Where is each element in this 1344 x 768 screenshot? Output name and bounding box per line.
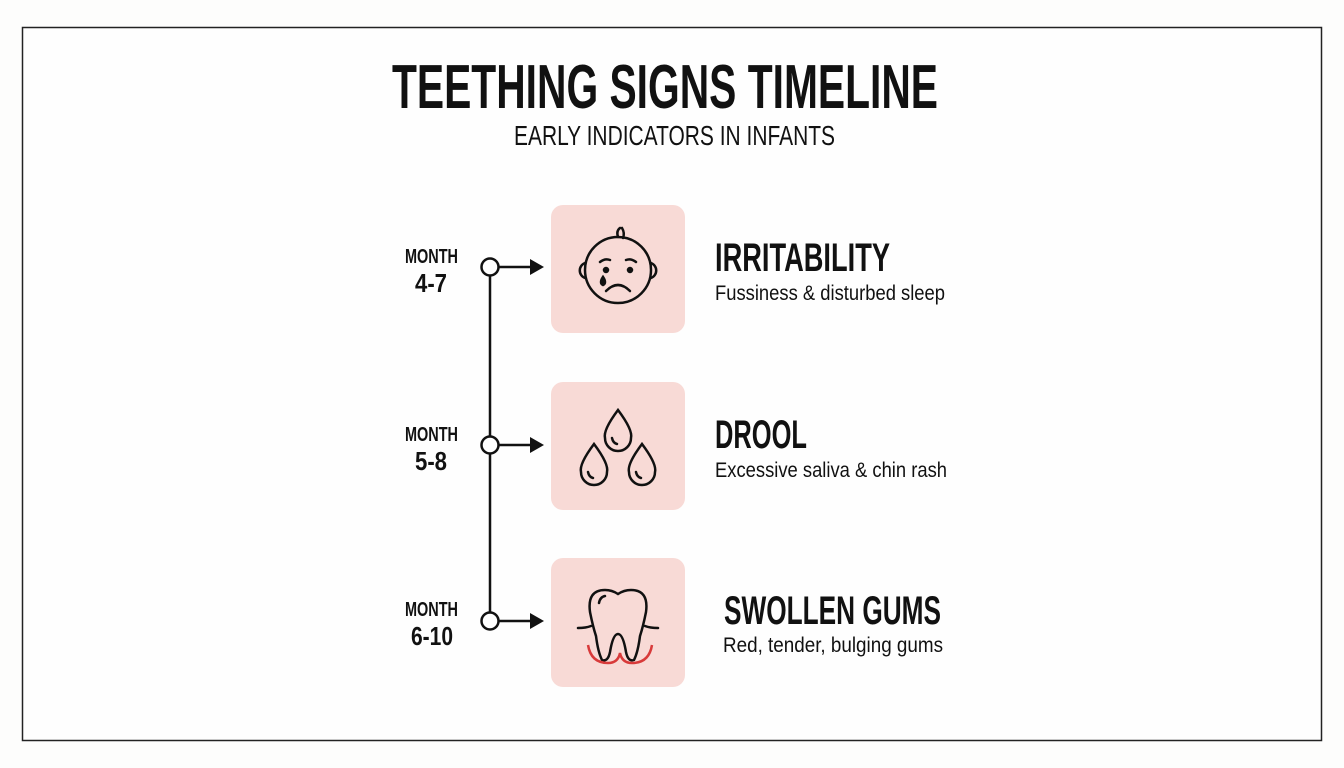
title: TEETHING SIGNS TIMELINE xyxy=(392,53,938,122)
month labels: 5-8 xyxy=(415,446,447,476)
month labels: 4-7 xyxy=(415,268,447,298)
icon: crying baby xyxy=(580,228,656,303)
icon: tooth xyxy=(578,590,658,660)
text: swollen gums: Red, tender, bulging gums xyxy=(723,634,943,657)
subtitle: EARLY INDICATORS IN INFANTS xyxy=(514,120,835,151)
month labels: MONTH xyxy=(405,246,458,268)
timeline xyxy=(482,258,532,630)
text: irritability: Fussiness & disturbed sleep xyxy=(715,282,945,305)
month labels xyxy=(405,246,458,651)
text: drool: Excessive saliva & chin rash xyxy=(715,459,947,482)
icon: drops xyxy=(581,410,655,485)
month labels: 6-10 xyxy=(411,621,453,651)
panel: swollen gums xyxy=(551,558,685,687)
panel: irritability xyxy=(551,205,685,333)
month labels: MONTH xyxy=(405,424,458,446)
month labels: MONTH xyxy=(405,599,458,621)
heading: swollen gums: SWOLLEN GUMS xyxy=(724,589,941,633)
panel: drool xyxy=(551,382,685,510)
heading: irritability: IRRITABILITY xyxy=(715,236,890,280)
arrowheads xyxy=(530,259,544,629)
heading: drool: DROOL xyxy=(715,413,807,457)
